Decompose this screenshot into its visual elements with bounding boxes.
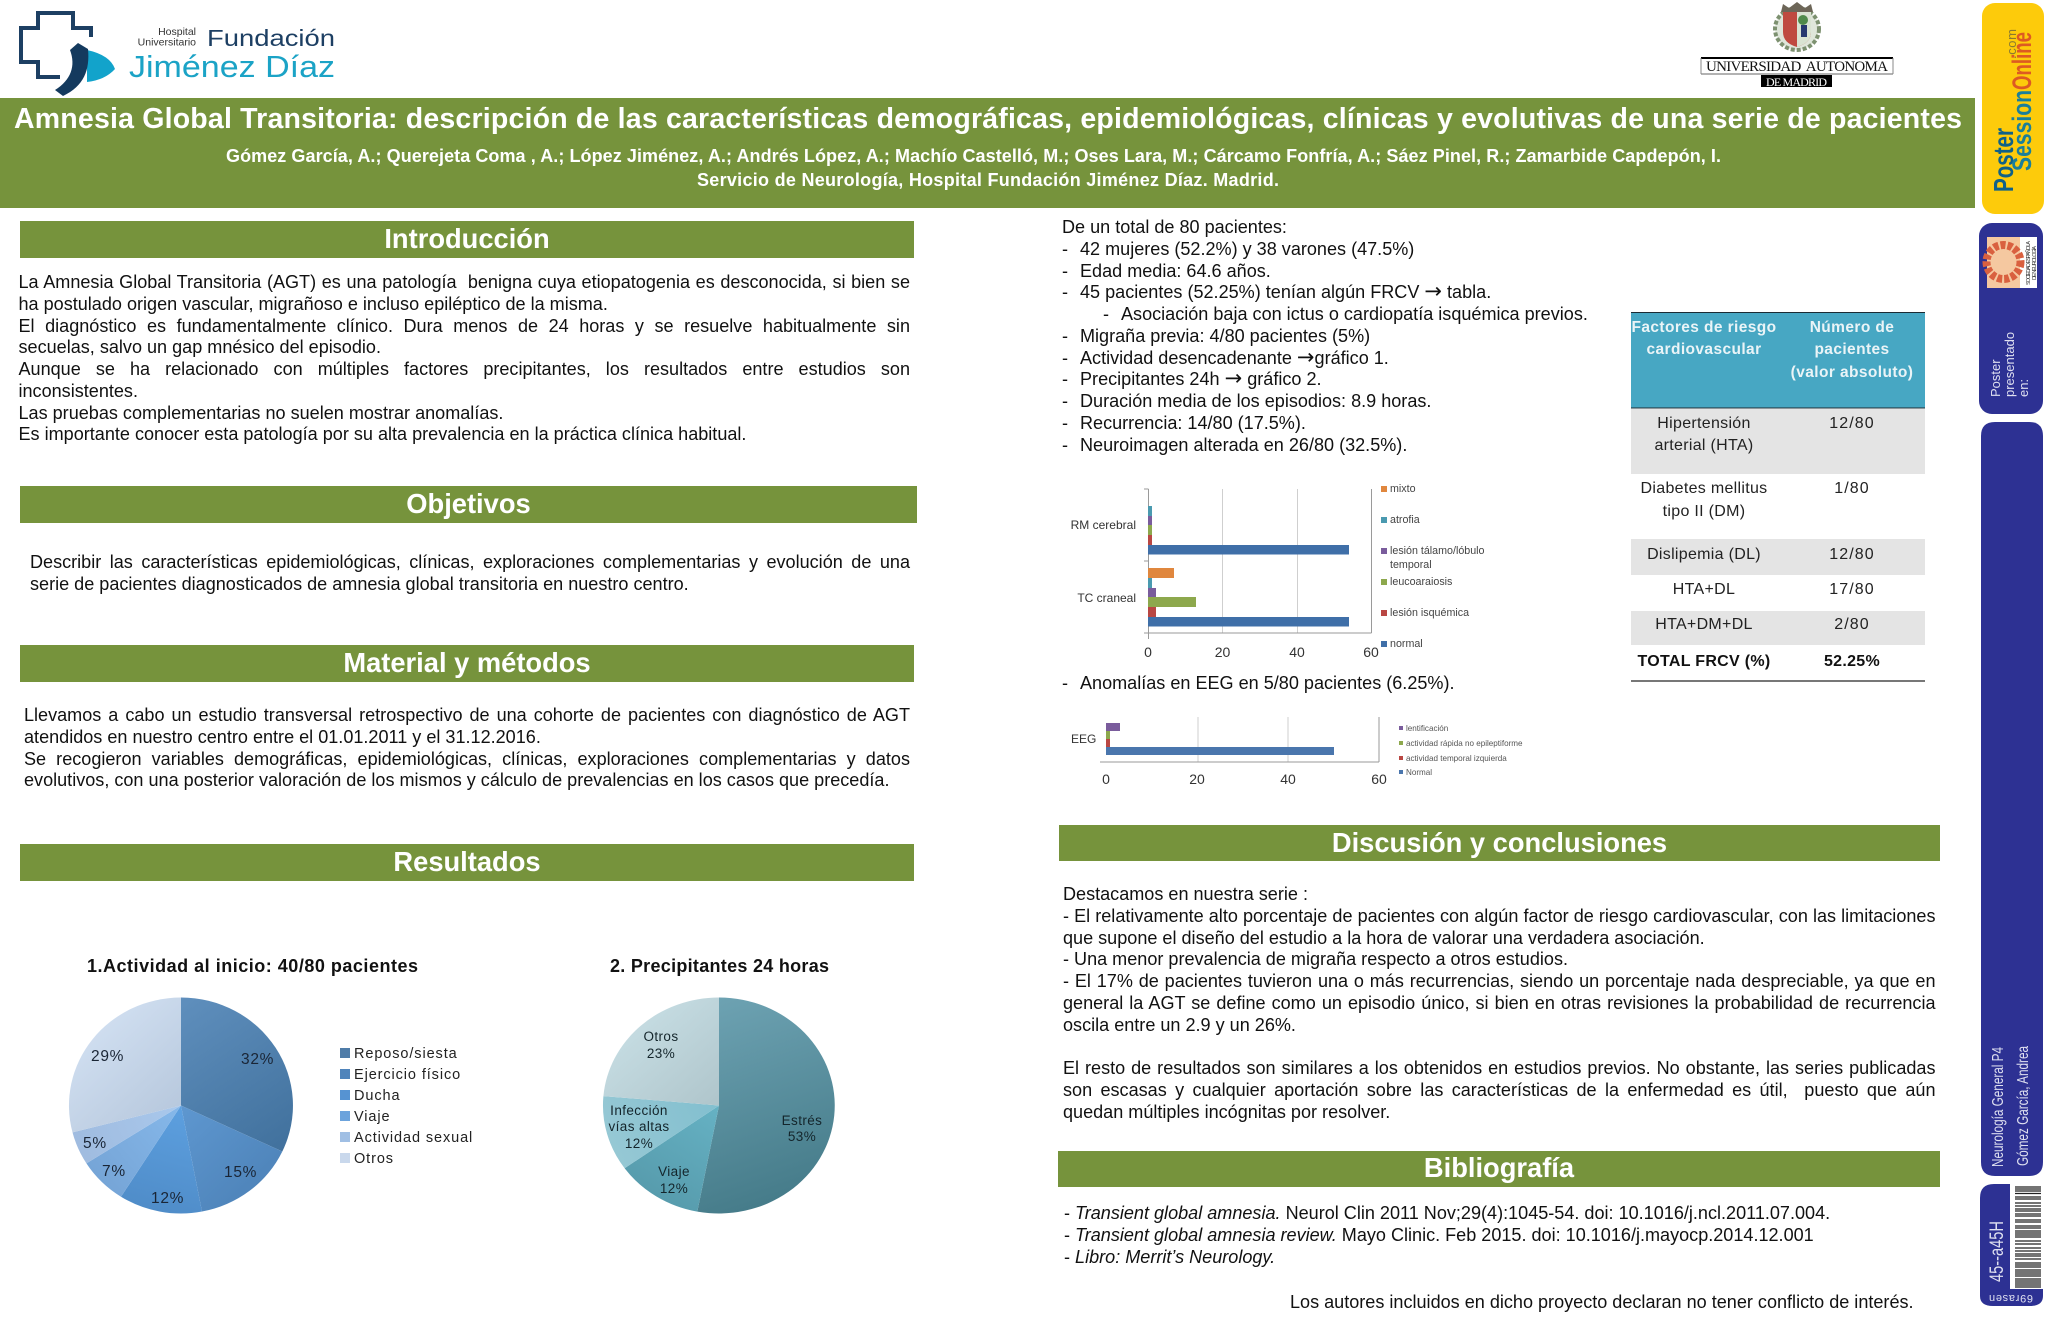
- logo: Hospital Fundación Jiménez Díaz: Jiménez Díaz: [129, 49, 335, 84]
- bar chart: neuroimagen: [1071, 483, 1485, 660]
- sidebar: barcode panel: 69rasen: [1989, 1292, 2033, 1304]
- pie 1 value labels: 12%: [151, 1190, 184, 1207]
- text: resultados list: Migraña previa: 4/80 pacientes (5%): [1080, 326, 1370, 346]
- bar chart legend: normal: [1390, 638, 1423, 650]
- text: material y métodos: [24, 705, 910, 790]
- text: material y métodos: evolutivos, con una posterior valoración de los mismos y cálculo de prevalencias en los casos que precedía.: [24, 770, 889, 790]
- logo: Universidad Autónoma de Madrid: DE MADRID: [1766, 75, 1827, 89]
- pie chart 1: actividad al inicio: [69, 956, 473, 1213]
- text: introducción: ha postulado origen vascular, migrañoso e incluso epiléptico de la misma.: [18, 294, 608, 314]
- bar chart: EEG: [1071, 717, 1523, 787]
- university name: [1701, 57, 1893, 59]
- pie 1 legend: Viaje: [354, 1109, 390, 1125]
- sidebar: Poster Session Online badge: Session: [2007, 90, 2037, 171]
- text: resultados list: 42 mujeres (52.2%) y 38 varones (47.5%): [1080, 239, 1414, 259]
- table header: [1631, 312, 1925, 408]
- text: discusión: Destacamos en nuestra serie :: [1063, 884, 1308, 904]
- risk factor table: Número de: [1810, 319, 1894, 336]
- text: discusión: - El relativamente alto porcentaje de pacientes con algún factor de riesgo cardiovascular, con las limitaciones: [1063, 906, 1936, 926]
- text: discusión: general la AGT se define como un episodio único, si bien en otras revisiones la probabilidad de recurrencia: [1063, 993, 1936, 1013]
- text: resultados list: -: [1062, 260, 1068, 280]
- x axis values: 20: [1215, 644, 1230, 660]
- risk factor table: Diabetes mellitus: [1641, 480, 1767, 497]
- text: material y métodos: Llevamos a cabo un estudio transversal retrospectivo de una cohorte de pacientes con diagnóstico de AGT: [24, 705, 910, 725]
- table rows: [1631, 409, 1925, 474]
- pie 1 value labels: 7%: [102, 1163, 126, 1180]
- heading: Discusión y conclusiones: Discusión y conclusiones: [1332, 827, 1667, 858]
- pie 1 value labels: [83, 1048, 274, 1207]
- title: Amnesia Global Transitoria: descripción de las características demográficas, epidemiológicas, clínicas y evolutivas de una serie de pacientes: [14, 103, 1962, 135]
- text: resultados list: Edad media: 64.6 años.: [1080, 260, 1271, 280]
- pie 1 legend: Ejercicio físico: [354, 1067, 461, 1083]
- text: resultados list: Actividad desencadenante →gráfico 1.: [1080, 344, 1389, 368]
- text: objetivos: [30, 552, 910, 594]
- text: resultados list: -: [1062, 282, 1068, 302]
- pie 1 legend: Reposo/siesta: [354, 1046, 458, 1062]
- risk factor table: 12/80: [1829, 415, 1875, 432]
- text: conflicto de interés: Los autores incluidos en dicho proyecto declaran no tener conflicto de interés.: [1290, 1292, 1914, 1312]
- pie 1 value labels: 32%: [241, 1051, 274, 1068]
- text: discusión: [1063, 884, 1936, 1122]
- text: discusión: que supone el diseño del estudio a la hora de valorar una verdadera asociación.: [1063, 928, 1705, 948]
- pie 1 value labels: 5%: [83, 1135, 107, 1152]
- risk factor table: Hipertensión: [1657, 415, 1751, 432]
- pie 1 heading: 1.Actividad al inicio: 40/80 pacientes: [87, 956, 418, 976]
- TC craneal bars: [1148, 568, 1349, 626]
- risk factor table: 52.25%: [1824, 653, 1880, 670]
- sidebar: Poster Session Online badge: [1982, 3, 2044, 214]
- bar chart legend: temporal: [1390, 559, 1432, 571]
- x axis values: 0: [1144, 644, 1152, 660]
- text: introducción: El diagnóstico es fundamentalmente clínico. Dura menos de 24 horas y se resuelve habitualmente sin: [18, 316, 910, 336]
- pie 2 heading: 2. Precipitantes 24 horas: [610, 956, 829, 976]
- heading: Introducción: [20, 221, 914, 258]
- EEG x axis values: [1102, 771, 1387, 787]
- risk factor table: 17/80: [1829, 581, 1875, 598]
- pie 1 legend: Ducha: [354, 1088, 400, 1104]
- text: resultados list: Recurrencia: 14/80 (17.5%).: [1080, 413, 1306, 433]
- authors: Gómez García, A.; Querejeta Coma , A.; López Jiménez, A.; Andrés López, A.; Machío Castelló, M.; Oses Lara, M.; Cárcamo Fonfría, A.; Sáez Pinel, R.; Zamarbide Capdepón, I.: [226, 146, 1721, 166]
- text: resultados list: Duración media de los episodios: 8.9 horas.: [1080, 391, 1431, 411]
- icon: crest shield: [1783, 12, 1811, 47]
- logo: Hospital Fundación Jiménez Díaz: Fundación: [207, 25, 335, 51]
- text: resultados list: [1062, 217, 1588, 455]
- logo: Universidad Autónoma de Madrid: [1701, 2, 1893, 89]
- bar chart legend: lesión isquémica: [1390, 607, 1469, 619]
- pie 2 value labels: Viaje: [658, 1164, 690, 1179]
- heading: Bibliografía: [1058, 1151, 1940, 1187]
- risk factor table: Factores de riesgo: [1631, 319, 1777, 336]
- sidebar: presented at panel: en:: [2016, 379, 2031, 397]
- text: resultados list: -: [1103, 304, 1109, 324]
- sidebar: Poster Session Online badge: Poster: [1988, 128, 2019, 192]
- text: resultados list: 45 pacientes (52.25%) tenían algún FRCV → tabla.: [1080, 279, 1491, 303]
- barcode: [2015, 1187, 2041, 1287]
- EEG x axis values: 20: [1189, 771, 1205, 787]
- pie 2 value labels: [608, 1029, 822, 1196]
- text: resultados list: De un total de 80 pacientes:: [1062, 217, 1287, 237]
- text: introducción: [18, 272, 910, 444]
- heading: Objetivos: [20, 486, 917, 523]
- pie 1 value labels: 15%: [224, 1164, 257, 1181]
- text: bibliografía: - Transient global amnesia review. Mayo Clinic. Feb 2015. doi: 10.1016/j.mayocp.2014.12.001: [1064, 1225, 1814, 1245]
- text: resultados list: -: [1062, 369, 1068, 389]
- heading: Objetivos: Objetivos: [406, 488, 531, 519]
- sidebar: barcode panel: 45--a45H: [1987, 1221, 2008, 1282]
- bar chart legend: leucoaraiosis: [1390, 576, 1452, 588]
- grid and axes: [1222, 489, 1298, 633]
- risk factor table: 1/80: [1834, 480, 1870, 497]
- risk factor table: arterial (HTA): [1654, 437, 1754, 454]
- text: material y métodos: Se recogieron variables demográficas, epidemiológicas, clínicas, exploraciones complementarias y datos: [24, 748, 910, 768]
- text: objetivos: Describir las características epidemiológicas, clínicas, exploraciones complementarias y evolución de una: [30, 552, 910, 572]
- icon: crest crown: [1781, 2, 1813, 12]
- table total: TOTAL FRCV (%): [1637, 653, 1771, 670]
- heading: Introducción: Introducción: [384, 223, 550, 254]
- header band: [0, 98, 1975, 208]
- RM cerebral bars: [1148, 506, 1349, 554]
- EEG x axis values: 60: [1371, 771, 1387, 787]
- EEG legend: Normal: [1406, 768, 1432, 777]
- risk factor table: (valor absoluto): [1791, 364, 1913, 381]
- pie 1 legend: Otros: [354, 1151, 394, 1167]
- text: EEG finding: -: [1062, 673, 1068, 693]
- text: resultados list: Precipitantes 24h → gráfico 2.: [1080, 366, 1322, 390]
- text: bibliografía: - Transient global amnesia. Neurol Clin 2011 Nov;29(4):1045-54. doi: 10.1016/j.ncl.2011.07.004.: [1064, 1203, 1830, 1223]
- text: discusión: - Una menor prevalencia de migraña respecto a otros estudios.: [1063, 949, 1568, 969]
- risk factor table: HTA+DM+DL: [1655, 616, 1753, 633]
- heading: Discusión y conclusiones: [1059, 825, 1940, 861]
- EEG legend: [1399, 724, 1523, 777]
- pie 2 value labels: 53%: [788, 1129, 816, 1144]
- text: resultados list: -: [1062, 391, 1068, 411]
- pie 2 value labels: vías altas: [608, 1119, 670, 1134]
- x axis values: [1144, 644, 1379, 660]
- heading: Bibliografía: Bibliografía: [1424, 1152, 1574, 1183]
- EEG legend: actividad temporal izquierda: [1406, 754, 1507, 763]
- text: introducción: secuelas, salvo un gap mnésico del episodio.: [18, 337, 381, 357]
- EEG legend: lentificación: [1406, 724, 1448, 733]
- x axis values: 60: [1363, 644, 1379, 660]
- pie 2 slices: [603, 998, 835, 1213]
- risk factor table: cardiovascular: [1646, 341, 1762, 358]
- risk factor table: Dislipemia (DL): [1647, 546, 1761, 563]
- pie 1 legend: Actividad sexual: [354, 1130, 473, 1146]
- logo: Hospital Fundación Jiménez Díaz: Universitario: [138, 36, 196, 48]
- risk factor table: 2/80: [1834, 616, 1870, 633]
- EEG bars: [1106, 723, 1334, 755]
- icon: crest wreath: [1775, 8, 1819, 50]
- heading: Resultados: Resultados: [393, 846, 541, 877]
- text: resultados list: Asociación baja con ictus o cardiopatía isquémica previos.: [1121, 304, 1588, 324]
- pie 1 value labels: 29%: [91, 1048, 124, 1065]
- text: introducción: La Amnesia Global Transitoria (AGT) es una patología benigna cuya etiopatogenia es desconocida, si bien se: [18, 272, 910, 292]
- sidebar: Poster Session Online badge: Online: [2007, 32, 2037, 90]
- EEG x axis values: 40: [1280, 771, 1296, 787]
- risk factor table: 12/80: [1829, 546, 1875, 563]
- heading: Material y métodos: Material y métodos: [343, 647, 591, 678]
- pie 1 slices: [69, 998, 293, 1213]
- affiliation: Servicio de Neurología, Hospital Fundación Jiménez Díaz. Madrid.: [697, 170, 1279, 190]
- sidebar: Poster Session Online badge: .com: [2004, 29, 2019, 59]
- pie 2 value labels: Infección: [610, 1103, 668, 1118]
- logo: Hospital Fundación Jiménez Díaz: [21, 13, 335, 96]
- text: resultados list: Neuroimagen alterada en 26/80 (32.5%).: [1080, 434, 1407, 454]
- text: discusión: - El 17% de pacientes tuvieron una o más recurrencias, siendo un porcentaje nada despreciable, ya que en: [1063, 971, 1936, 991]
- text: introducción: inconsistentes.: [18, 381, 138, 401]
- text: introducción: Aunque se ha relacionado con múltiples factores precipitantes, los resultados entre estudios son: [18, 359, 910, 379]
- x axis values: 40: [1289, 644, 1305, 660]
- risk factor table: HTA+DL: [1673, 581, 1735, 598]
- logo text: Hospital: [158, 26, 196, 38]
- sidebar: presented at panel: SOCIEDAD ESPAÑOLA: [2025, 241, 2032, 285]
- text: discusión: El resto de resultados son similares a los obtenidos en estudios previos. No obstante, las series publicadas: [1063, 1058, 1936, 1078]
- sidebar: session panel: Neurología General P4: [1990, 1047, 2007, 1167]
- pie chart 2: precipitantes 24 horas: [603, 956, 835, 1213]
- pie 2 value labels: 12%: [660, 1181, 688, 1196]
- sidebar: session panel: [1981, 422, 2043, 1176]
- text: resultados list: -: [1062, 413, 1068, 433]
- bar chart labels: RM cerebral: [1071, 518, 1136, 532]
- heading: Resultados: [20, 844, 914, 881]
- logo: Universidad Autónoma de Madrid: UNIVERSIDAD AUTONOMA: [1706, 59, 1888, 75]
- risk factor table: [1631, 312, 1925, 681]
- text: discusión: son escasas y cualquier aportación sobre las características de la enfermedad es útil, puesto que aún: [1063, 1080, 1936, 1100]
- sidebar: session panel: Gómez García, Andrea: [2015, 1046, 2032, 1166]
- EEG legend: actividad rápida no epileptiforme: [1406, 739, 1523, 748]
- text: resultados list: -: [1062, 348, 1068, 368]
- pie 2 value labels: Estrés: [782, 1113, 822, 1128]
- text: resultados list: -: [1062, 239, 1068, 259]
- pie 2 value labels: Otros: [643, 1029, 679, 1044]
- icon: navy J: [55, 43, 88, 96]
- text: resultados list: -: [1062, 326, 1068, 346]
- bar chart legend: mixto: [1390, 483, 1416, 495]
- text: bibliografía: - Libro: Merrit’s Neurology.: [1064, 1246, 1275, 1266]
- risk factor table: pacientes: [1814, 341, 1890, 358]
- sidebar: barcode panel: [1980, 1184, 2043, 1306]
- bar chart legend: atrofia: [1390, 514, 1420, 526]
- heading: Material y métodos: [20, 645, 914, 682]
- bar chart labels: TC craneal: [1077, 591, 1136, 605]
- text: bibliografía: [1064, 1203, 1830, 1267]
- bar chart labels: [1071, 518, 1136, 605]
- bar chart legend: [1381, 483, 1485, 650]
- text: discusión: quedan múltiples incógnitas por resolver.: [1063, 1102, 1390, 1122]
- icon: cyan dome: [87, 50, 115, 82]
- EEG label: EEG: [1071, 732, 1096, 746]
- bar chart legend: lesión tálamo/lóbulo: [1390, 545, 1485, 557]
- text: material y métodos: atendidos en nuestro centro entre el 01.01.2011 y el 31.12.2016.: [24, 727, 541, 747]
- sidebar: presented at panel: [1979, 223, 2043, 414]
- sidebar text: Poster: [1988, 359, 2003, 397]
- text: discusión: oscila entre un 2.9 y un 26%.: [1063, 1014, 1296, 1034]
- text: objetivos: serie de pacientes diagnosticados de amnesia global transitoria en nuestro centro.: [30, 574, 689, 594]
- text: introducción: Es importante conocer esta patología por su alta prevalencia en la práctica clínica habitual.: [18, 424, 746, 444]
- text: EEG finding: Anomalías en EEG en 5/80 pacientes (6.25%).: [1080, 673, 1455, 693]
- pie 2 value labels: 12%: [625, 1136, 653, 1151]
- risk factor table: tipo II (DM): [1663, 503, 1745, 520]
- sidebar: presented at panel: DE NEUROLOGÍA: [2031, 246, 2038, 280]
- EEG x axis values: 0: [1102, 771, 1110, 787]
- icon: cross outline: [21, 13, 91, 77]
- pie 2 value labels: 23%: [647, 1046, 675, 1061]
- text: introducción: Las pruebas complementarias no suelen mostrar anomalías.: [18, 402, 503, 422]
- icon: society logo: [1987, 237, 2037, 288]
- text: resultados list: -: [1062, 434, 1068, 454]
- sidebar: presented at panel: presentado: [2002, 332, 2017, 397]
- pie 1 legend: [340, 1046, 473, 1167]
